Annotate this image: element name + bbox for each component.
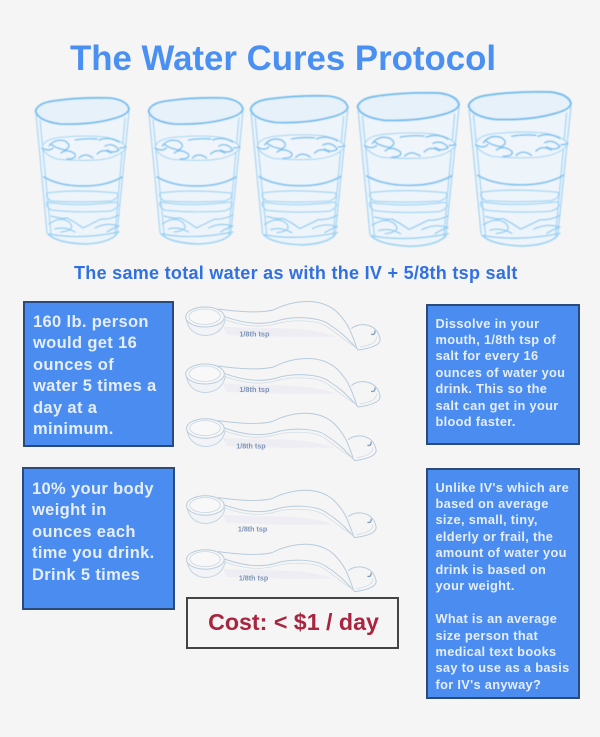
panel: unlike IVs: size, small, tiny, — [436, 512, 538, 527]
panel: 10% body weight: Drink 5 times — [32, 566, 140, 584]
title: The Water Cures Protocol — [70, 39, 496, 78]
spoon 2: 1/8th tsp — [239, 385, 270, 394]
panel: 160 lb person — [23, 301, 174, 447]
cost box — [186, 597, 399, 649]
panel: dissolve salt: Dissolve in your — [436, 316, 539, 330]
glass 3 — [251, 95, 348, 246]
spoon 4 — [187, 490, 376, 538]
spoon 3: 1/8th tsp — [236, 443, 266, 451]
cost box: Cost: < $1 / day — [208, 609, 379, 635]
panel: unlike IVs: say to use as a basis — [436, 660, 570, 675]
spoon 4: 1/8th tsp — [238, 525, 268, 533]
panel: unlike IVs: for IV's anyway? — [436, 677, 541, 692]
panel: unlike IVs: medical text books — [436, 644, 556, 659]
panel: unlike IVs: based on average — [436, 496, 549, 511]
panel: 160 lb person: water 5 times a — [33, 377, 157, 395]
panel: dissolve salt: mouth, 1/8th tsp of — [436, 332, 556, 347]
spoon 5: 1/8th tsp — [239, 574, 269, 582]
panel: 160 lb person: day at a — [33, 398, 97, 416]
panel: dissolve salt: drink. This so the — [436, 381, 547, 396]
spoon 5 — [187, 544, 376, 592]
glass 5 — [469, 91, 571, 247]
spoon 1 — [186, 301, 380, 350]
panel: 10% body weight — [22, 467, 175, 610]
panel: unlike IVs: What is an average — [436, 611, 557, 626]
panel: dissolve salt: salt for every 16 — [436, 348, 538, 363]
panel: dissolve salt — [426, 304, 580, 445]
panel: unlike IVs: elderly or frail, the — [436, 529, 553, 544]
panel: unlike IVs: drink is based on — [436, 562, 546, 577]
spoon 3 — [187, 413, 376, 461]
panel: 10% body weight: ounces each — [32, 522, 136, 540]
panel: dissolve salt: blood faster. — [436, 414, 516, 429]
panel: 160 lb person: 160 lb. person — [33, 312, 149, 330]
panel: unlike IVs — [426, 468, 580, 699]
glass 4 — [358, 92, 459, 247]
panel: 160 lb person: minimum. — [33, 420, 114, 438]
spoon 1: 1/8th tsp — [239, 330, 270, 339]
spoon 2 — [186, 358, 380, 407]
glass 1 — [36, 97, 129, 245]
panel: 10% body weight: weight in — [32, 501, 107, 519]
panel: 160 lb person: ounces of — [33, 356, 114, 374]
panel: unlike IVs: amount of water you — [436, 545, 567, 560]
panel: unlike IVs: Unlike IV's which are — [436, 480, 569, 494]
panel: unlike IVs: your weight. — [436, 578, 515, 593]
panel: 10% body weight: time you drink. — [32, 544, 155, 562]
panel: 10% body weight: 10% your body — [32, 480, 154, 498]
panel: dissolve salt: salt can get in your — [436, 398, 559, 413]
panel: unlike IVs: size person that — [436, 628, 538, 643]
glass 2 — [149, 97, 243, 245]
panel: 160 lb person: would get 16 — [33, 334, 137, 352]
row of five water glasses — [34, 90, 572, 248]
panel: dissolve salt: ounces of water you — [436, 365, 565, 380]
subtitle: The same total water as with the IV + 5/8th tsp salt — [74, 263, 518, 283]
